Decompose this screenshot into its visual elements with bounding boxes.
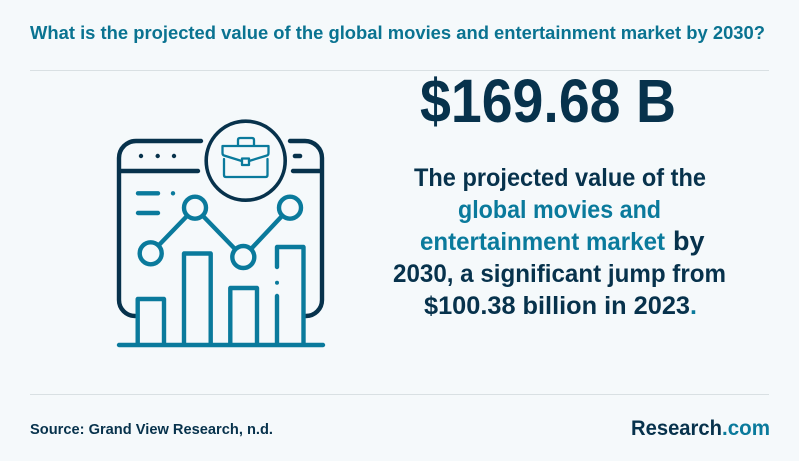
description text — [393, 164, 726, 320]
icon: analytics window with briefcase — [119, 121, 323, 345]
icon: bar chart and trend line — [119, 191, 323, 345]
logo: Research.com: .com — [722, 417, 770, 440]
icon: browser window — [119, 141, 322, 316]
icon: briefcase badge — [206, 121, 285, 200]
description text: $100.38 billion in 2023 — [424, 292, 690, 320]
description text: . — [690, 292, 697, 320]
description text: global movies and — [458, 196, 661, 224]
description text: entertainment market — [420, 228, 666, 256]
description text: by — [673, 226, 705, 256]
source note: Source: Grand View Research, n.d. — [30, 422, 273, 438]
logo: Research.com: Research — [631, 417, 722, 440]
headline value: $169.68 B — [420, 67, 676, 135]
description text: 2030, a significant jump from — [393, 260, 726, 288]
logo: Research.com — [631, 417, 770, 440]
description text: The projected value of the — [414, 164, 706, 192]
title: What is the projected value of the global movies and entertainment market by 2030? — [30, 23, 765, 43]
